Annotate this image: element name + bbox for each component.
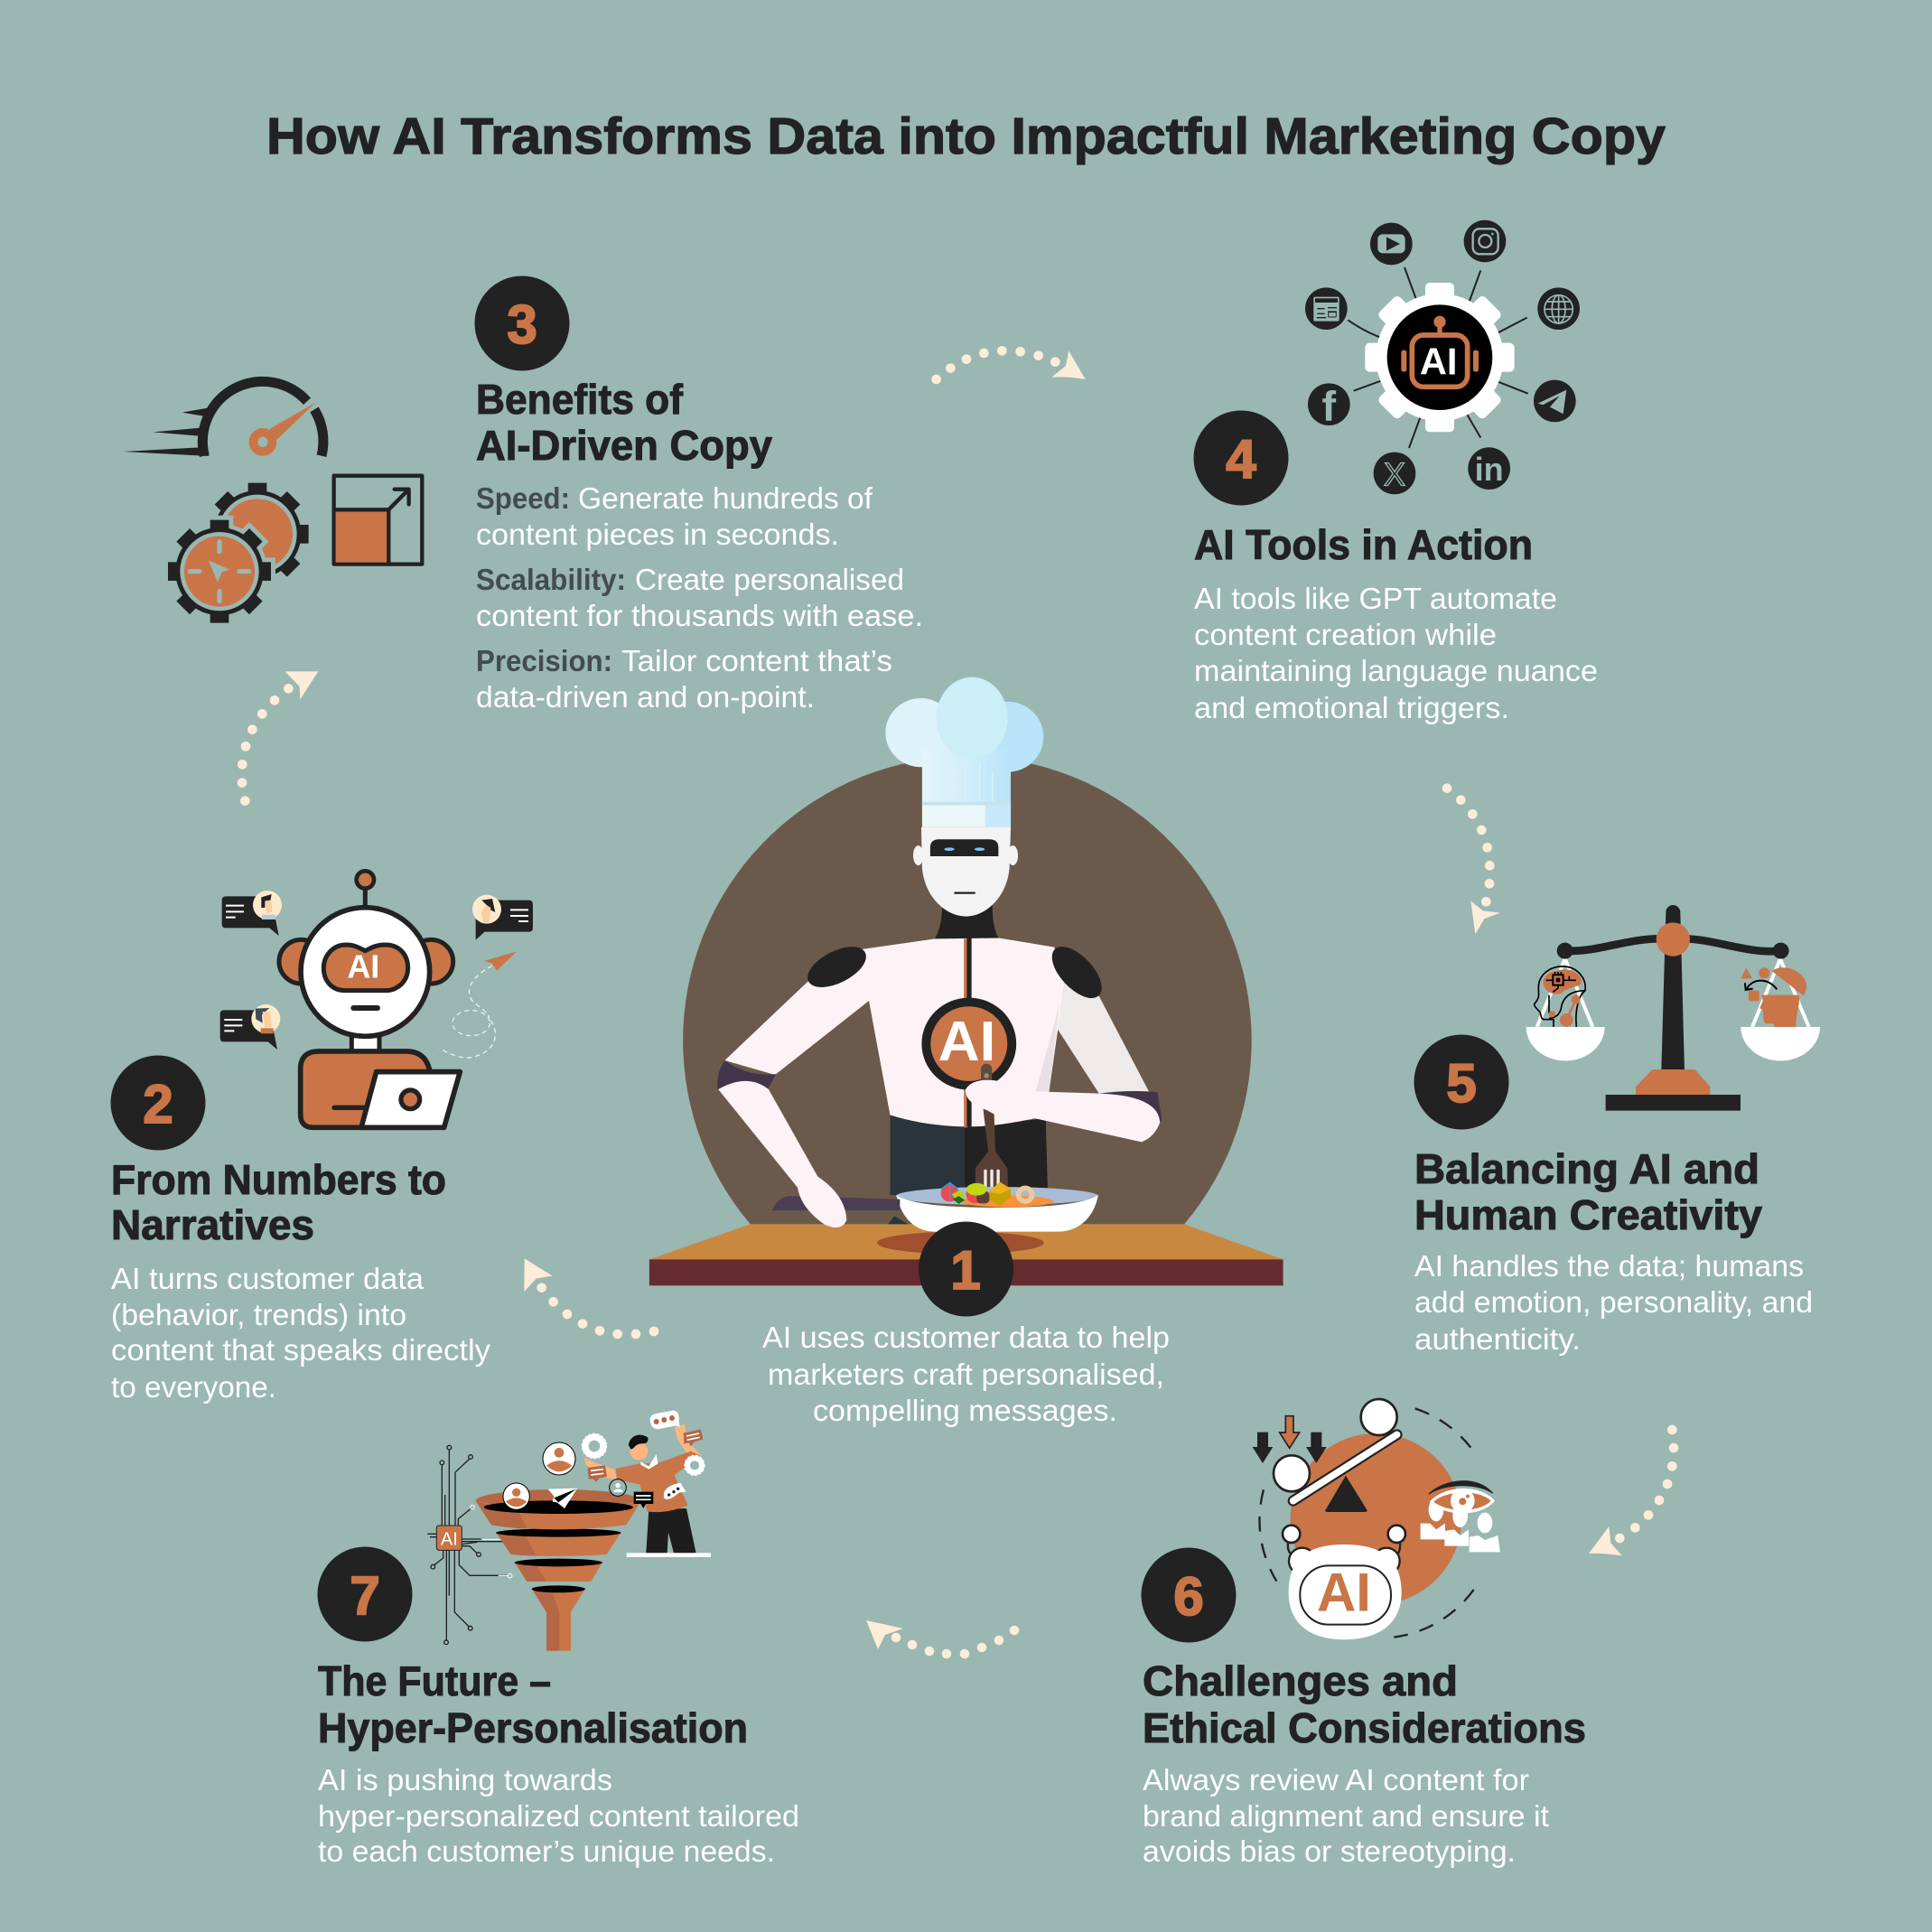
- body text: step 6: Always review AI content for: [1143, 1763, 1529, 1797]
- body text: step 1: compelling messages.: [813, 1394, 1117, 1427]
- panel: step 4 AI tools in action: [1194, 220, 1598, 724]
- badge: number 7: 7: [350, 1565, 380, 1626]
- heading: step 6: [1143, 1657, 1586, 1751]
- heading: step 4: AI Tools in Action: [1194, 521, 1533, 568]
- heading: step 5: Human Creativity: [1414, 1191, 1762, 1238]
- icon: AI gear with social network icons: AI: [1420, 340, 1457, 382]
- body text: step 4: maintaining language nuance: [1194, 654, 1598, 687]
- body text: step 3: Tailor content that’s: [621, 644, 892, 677]
- body text: step 2: content that speaks directly: [111, 1333, 491, 1367]
- body text: step 2: to everyone.: [111, 1370, 276, 1404]
- body text: step 6: brand alignment and ensure it: [1143, 1799, 1549, 1833]
- body text: step 2: AI turns customer data: [111, 1262, 425, 1295]
- heading: step 7: Hyper-Personalisation: [318, 1704, 748, 1751]
- icon: robot with laptop and chat bubbles: AI: [347, 948, 379, 985]
- body text: step 1: AI uses customer data to help: [762, 1321, 1170, 1354]
- badge: number 3: 3: [507, 294, 537, 355]
- body text: step 3: Precision:: [476, 644, 612, 677]
- panel: step 7 the future: [318, 1411, 799, 1868]
- body text: step 6: avoids bias or stereotyping.: [1143, 1834, 1516, 1868]
- heading: step 2: From Numbers to: [111, 1156, 446, 1203]
- body text: step 1: [762, 1321, 1170, 1427]
- heading: step 5: [1414, 1145, 1762, 1238]
- heading: step 3: AI-Driven Copy: [476, 422, 772, 469]
- heading: step 5: Balancing AI and: [1414, 1145, 1759, 1192]
- icon: robot with laptop and chat bubbles: [220, 871, 533, 1127]
- badge: number 1: [919, 1221, 1013, 1317]
- heading: step 2: [111, 1156, 446, 1248]
- body text: step 3: data-driven and on-point.: [476, 680, 815, 714]
- illustration: robot chef: [649, 677, 1283, 1285]
- arrow: step 4 to step 5: [1442, 783, 1500, 934]
- icon: AI gear with social network icons: [1305, 220, 1580, 494]
- badge: number 5: 5: [1446, 1053, 1477, 1114]
- body text: step 4: and emotional triggers.: [1194, 691, 1509, 724]
- body text: step 4: AI tools like GPT automate: [1194, 582, 1557, 615]
- heading: step 3: Benefits of: [476, 376, 684, 423]
- badge: number 1: 1: [950, 1240, 981, 1301]
- panel: step 6 challenges and ethics: [1142, 1399, 1586, 1868]
- arrow: step 6 to step 7: [866, 1620, 1019, 1658]
- arrow: step 1 to step 2: [524, 1258, 658, 1339]
- badge: number 6: 6: [1173, 1566, 1204, 1627]
- badge: number 4: [1194, 410, 1288, 506]
- badge: number 3: [475, 276, 569, 370]
- panel: step 1 central chef robot: [649, 677, 1283, 1427]
- icon: speedometer, gears and scaling square: [124, 381, 422, 623]
- body text: step 3: content pieces in seconds.: [476, 518, 839, 551]
- badge: number 6: [1142, 1548, 1236, 1642]
- arrow: step 2 to step 3: [238, 671, 318, 806]
- body text: step 5: authenticity.: [1414, 1322, 1581, 1356]
- icon: AI robot with tilted seesaw and eye: [1253, 1399, 1500, 1639]
- body text: step 7: hyper-personalized content tailored: [318, 1799, 799, 1833]
- icon: marketing funnel with AI chip and person: AI: [441, 1529, 458, 1549]
- body text: step 3: Speed:: [476, 481, 570, 515]
- title: How AI Transforms Data into Impactful Marketing Copy: [266, 107, 1666, 165]
- icon: marketing funnel with AI chip and person: [427, 1411, 711, 1651]
- badge: number 2: [110, 1055, 206, 1151]
- badge: number 5: [1414, 1035, 1508, 1129]
- icon: AI gear with social network icons: f: [1322, 382, 1337, 429]
- body text: step 7: to each customer’s unique needs.: [318, 1834, 775, 1868]
- panel: step 5 balancing AI and human creativity: [1414, 905, 1820, 1356]
- body text: step 3: Generate hundreds of: [578, 481, 873, 515]
- icon: AI gear with social network icons: X: [1384, 455, 1405, 492]
- icon: balance scale with two heads: [1526, 905, 1820, 1111]
- body text: step 3: Scalability:: [476, 563, 626, 596]
- body text: step 3: Create personalised: [635, 563, 904, 596]
- panel: step 3 benefits: [124, 276, 923, 714]
- heading: step 7: [318, 1657, 748, 1751]
- body text: step 2: (behavior, trends) into: [111, 1298, 406, 1331]
- heading: step 3: [476, 376, 772, 469]
- body text: step 5: AI handles the data; humans: [1414, 1249, 1804, 1283]
- body text: step 7: [318, 1763, 799, 1868]
- chest label: AI: [938, 1011, 995, 1073]
- body text: step 3: [476, 481, 923, 714]
- body text: step 7: AI is pushing towards: [318, 1763, 612, 1797]
- badge: number 7: [318, 1546, 412, 1642]
- body text: step 4: content creation while: [1194, 618, 1497, 651]
- body text: step 2: [111, 1262, 491, 1404]
- heading: step 6: Challenges and: [1143, 1657, 1458, 1704]
- heading: step 6: Ethical Considerations: [1143, 1704, 1586, 1751]
- badge: number 4: 4: [1226, 429, 1256, 490]
- panel: step 2 from numbers to narratives: [110, 871, 533, 1404]
- arrow: step 3 to step 4: [931, 346, 1086, 384]
- body text: step 5: add emotion, personality, and: [1414, 1285, 1813, 1319]
- badge: number 2: 2: [143, 1074, 173, 1134]
- body text: step 6: [1143, 1763, 1549, 1868]
- body text: step 5: [1414, 1249, 1813, 1356]
- heading: step 7: The Future –: [318, 1657, 551, 1704]
- arrow: step 5 to step 6: [1589, 1425, 1678, 1556]
- heading: step 2: Narratives: [111, 1201, 314, 1248]
- icon: AI gear with social network icons: in: [1475, 451, 1504, 488]
- icon: AI robot with tilted seesaw and eye: AI: [1317, 1563, 1371, 1623]
- body text: step 1: marketers craft personalised,: [768, 1358, 1164, 1391]
- body text: step 4: [1194, 582, 1598, 724]
- body text: step 3: content for thousands with ease.: [476, 599, 923, 632]
